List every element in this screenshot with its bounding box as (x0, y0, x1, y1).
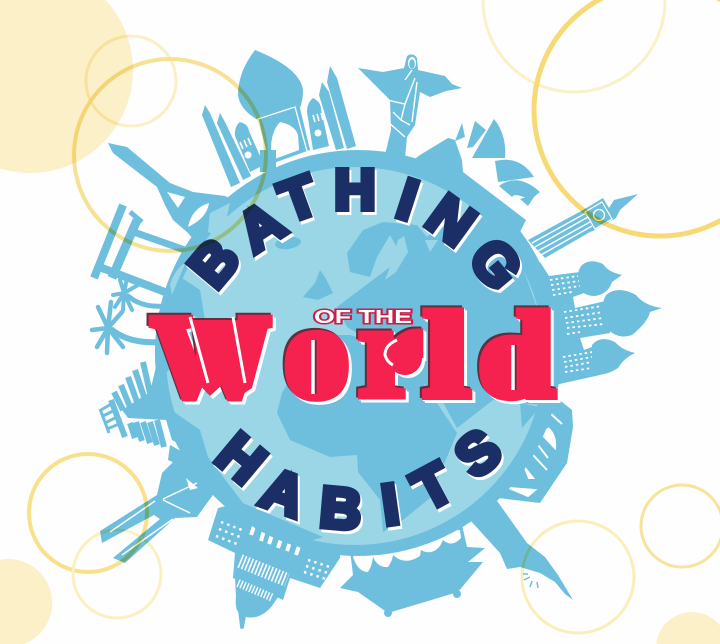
title word: BATHING: N (415, 183, 486, 259)
title: OF THE: OF THE (314, 307, 412, 327)
light continent slivers (170, 203, 438, 295)
title word: HABITS: B (318, 475, 364, 543)
World letter highlights (190, 317, 516, 394)
landmark: Capitol building (208, 500, 340, 628)
landmark: Colosseum ruin (498, 398, 573, 503)
title word: BATHING (177, 158, 534, 302)
globe (140, 150, 561, 560)
landmark: Sydney Opera House (455, 119, 540, 206)
title word: HABITS: T (403, 450, 463, 523)
landmark: Christ the Redeemer (358, 54, 462, 158)
landmark: palm trees (92, 278, 165, 353)
globe ocean (166, 167, 544, 545)
title word: BATHING: B (177, 227, 252, 300)
title word: HABITS: A (253, 456, 314, 530)
title word: HABITS: I (378, 472, 403, 538)
landmark: Eiffel Tower (108, 143, 245, 252)
landmark: domed temple (340, 525, 485, 617)
title: World: W (152, 295, 269, 421)
title word: BATHING: H (334, 158, 376, 222)
landmark: Taj Mahal (202, 50, 356, 187)
title word: HABITS (204, 417, 513, 543)
title: World: o (283, 278, 350, 427)
title: World: l (424, 288, 470, 423)
landmark: Petronas towers (100, 445, 225, 563)
landmark: stepped pyramid (100, 350, 190, 450)
globe outer ring (155, 150, 561, 556)
title: World: d (478, 288, 555, 423)
landmark: Sugarloaf mountain (400, 138, 540, 270)
title word: BATHING: I (390, 167, 425, 233)
title: World (152, 277, 555, 427)
title word: BATHING: G (457, 227, 534, 302)
title: World: r (358, 277, 423, 426)
title word: HABITS: H (204, 421, 277, 496)
landmark: onion dome palace (530, 261, 662, 385)
skyline of world landmarks (92, 50, 662, 628)
title word: BATHING: T (271, 163, 326, 235)
landmark: Torii gate (94, 205, 185, 292)
title word: BATHING: A (226, 189, 296, 265)
landmark: Statue of Liberty (450, 490, 573, 600)
landmark: Big Ben (528, 194, 638, 258)
title word: HABITS: S (443, 417, 513, 490)
continents (155, 214, 538, 545)
